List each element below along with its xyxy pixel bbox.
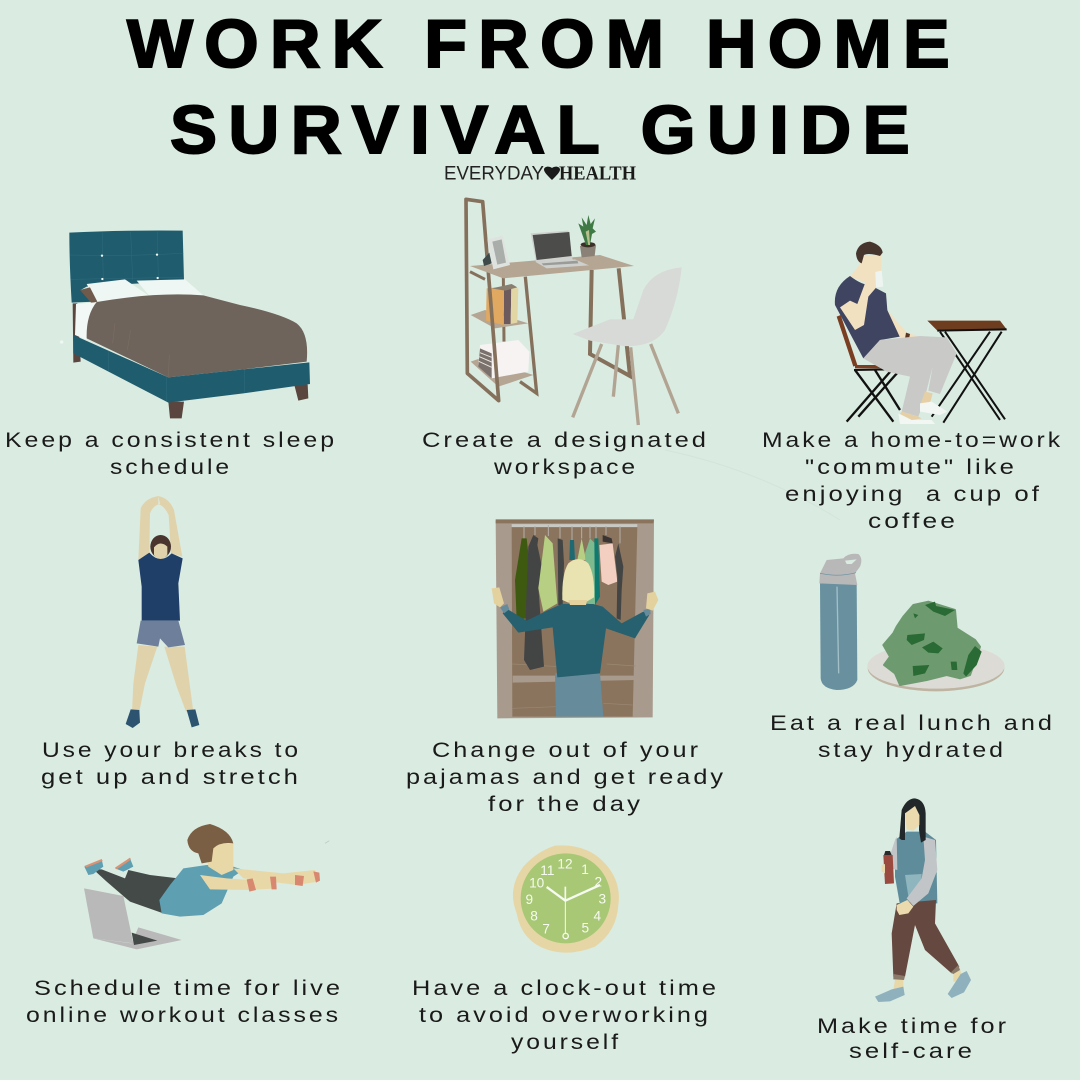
icon: clock: 8 <box>530 909 538 924</box>
text: sleep: Keep a consistent sleep <box>5 429 337 452</box>
text: stretch: Use your breaks to <box>42 739 301 762</box>
icon: clock: 5 <box>582 921 590 936</box>
logo: Everyday Health <box>444 162 636 184</box>
text: clock-out: yourself <box>511 1031 621 1054</box>
text: lunch: stay hydrated <box>818 739 1006 762</box>
icon: clock: 12 <box>557 856 573 871</box>
icon: clock: 1 <box>581 862 589 877</box>
text: clock-out: to avoid overworking <box>419 1004 711 1027</box>
title: SURVIVAL GUIDE <box>170 92 921 168</box>
text: sleep: schedule <box>110 456 232 479</box>
logo: Everyday Health: EVERYDAY <box>444 162 544 184</box>
icon: clock <box>513 845 619 953</box>
text: workout: online workout classes <box>26 1004 341 1027</box>
icon: clock: 3 <box>599 891 606 906</box>
icon: clock: 4 <box>594 909 602 924</box>
logo: Everyday Health: HEALTH <box>559 164 636 184</box>
text: change clothes: pajamas and get ready <box>406 766 726 789</box>
icon: bed <box>60 231 310 418</box>
icon: desk and chair <box>466 199 682 425</box>
icon: woman at closet <box>492 519 658 718</box>
text: workspace: Create a designated <box>422 429 709 452</box>
icon: clock: 7 <box>542 921 550 936</box>
icon: clock: 9 <box>526 892 533 907</box>
icon: woman walking <box>875 798 971 1002</box>
icon: clock: 11 <box>540 863 554 878</box>
text: commute: Make a home-to=work <box>762 429 1063 452</box>
text: self-care: Make time for <box>817 1015 1009 1038</box>
title <box>127 6 961 168</box>
icon: man drinking coffee at table <box>835 242 1007 424</box>
text: clock-out: Have a clock-out time <box>412 977 719 1000</box>
text: stretch: get up and stretch <box>41 766 301 789</box>
text: workout: Schedule time for live <box>34 977 343 1000</box>
text: commute: coffee <box>868 510 958 533</box>
text: self-care: self-care <box>849 1040 975 1063</box>
text: lunch: Eat a real lunch and <box>770 712 1055 735</box>
text: workspace: workspace <box>493 456 638 479</box>
title: WORK FROM HOME <box>127 6 961 82</box>
icon: woman stretching <box>126 496 199 728</box>
text: commute: "commute" like <box>805 456 1017 479</box>
icon: clock: 2 <box>595 875 602 890</box>
text: commute: enjoying a cup of <box>785 483 1042 506</box>
text: change clothes: for the day <box>488 793 643 816</box>
icon: water bottle and salad <box>819 554 1005 691</box>
icon: clock: 10 <box>529 876 545 891</box>
text: change clothes: Change out of your <box>432 739 701 762</box>
icon: online workout with laptop <box>84 824 329 949</box>
